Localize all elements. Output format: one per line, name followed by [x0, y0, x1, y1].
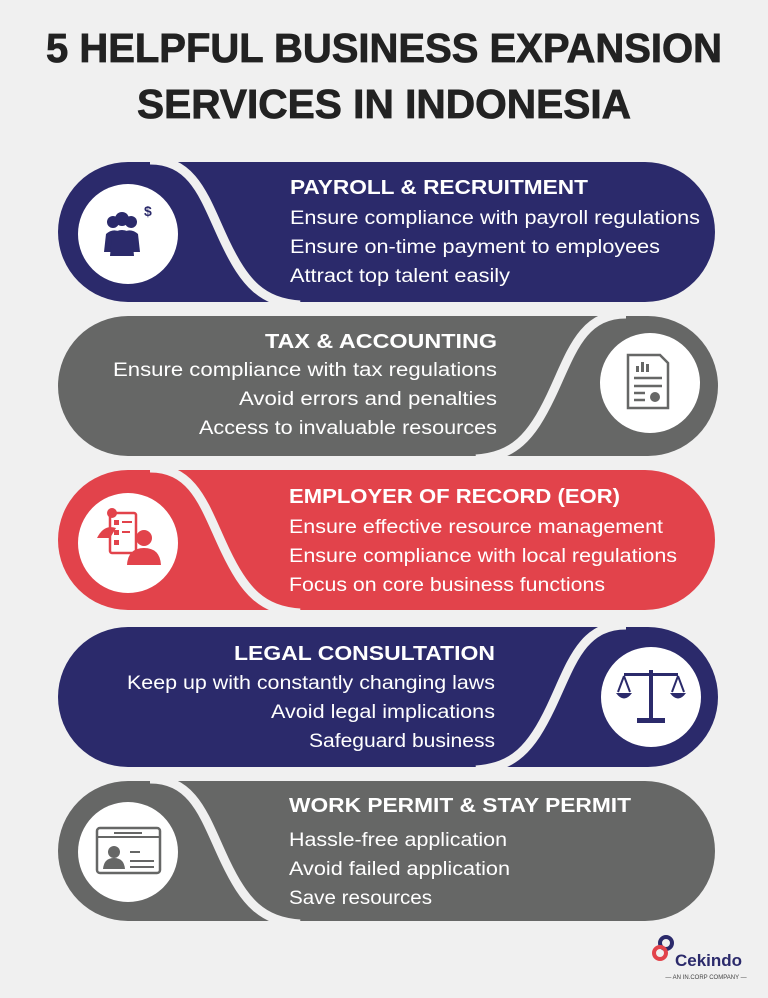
panel: tax & accounting: [58, 314, 718, 459]
text: legal: Avoid legal implications: [271, 702, 495, 723]
text: tax: TAX & ACCOUNTING: [265, 331, 497, 353]
icon: clipboard with person: [78, 493, 178, 593]
text: payroll: [290, 177, 700, 287]
text: work permit: Hassle-free application: [289, 830, 507, 851]
text: payroll: Ensure on-time payment to employees: [290, 237, 660, 258]
title: 5 HELPFUL BUSINESS EXPANSION: [46, 25, 722, 71]
icon: people with dollar: [78, 184, 178, 284]
panel: legal consultation: [58, 625, 718, 770]
text: legal: Keep up with constantly changing laws: [127, 673, 495, 694]
panel: work permit & stay permit: [58, 779, 715, 924]
icon: id card: [78, 802, 178, 902]
text: eor: Focus on core business functions: [289, 575, 605, 596]
title: [46, 25, 722, 127]
panel: payroll & recruitment: [58, 160, 715, 305]
text: work permit: Save resources: [289, 888, 432, 909]
text: eor: [289, 486, 677, 596]
text: work permit: WORK PERMIT & STAY PERMIT: [289, 795, 631, 817]
text: legal: [127, 643, 495, 752]
text: work permit: Avoid failed application: [289, 859, 510, 880]
text: tax: [113, 331, 497, 439]
logo: Cekindo: — AN IN.CORP COMPANY —: [665, 975, 747, 981]
icon: scales: [601, 647, 701, 747]
text: tax: Access to invaluable resources: [199, 418, 497, 439]
text: legal: Safeguard business: [309, 731, 495, 752]
text: eor: EMPLOYER OF RECORD (EOR): [289, 486, 620, 508]
logo: Cekindo: Cekindo: [675, 951, 742, 970]
text: legal: LEGAL CONSULTATION: [234, 643, 495, 665]
text: payroll: PAYROLL & RECRUITMENT: [290, 177, 588, 199]
title: SERVICES IN INDONESIA: [137, 81, 631, 127]
text: eor: Ensure effective resource management: [289, 517, 664, 538]
text: tax: Ensure compliance with tax regulations: [113, 360, 497, 381]
text: tax: Avoid errors and penalties: [239, 389, 497, 410]
text: payroll: Attract top talent easily: [290, 266, 511, 287]
icon: document report: [600, 333, 700, 433]
logo: Cekindo: [654, 937, 747, 981]
text: payroll: Ensure compliance with payroll regulations: [290, 208, 700, 229]
text: eor: Ensure compliance with local regulations: [289, 546, 677, 567]
text: work permit: [289, 795, 631, 909]
panel: employer of record: [58, 468, 715, 613]
icon: people with dollar: $: [144, 203, 152, 219]
